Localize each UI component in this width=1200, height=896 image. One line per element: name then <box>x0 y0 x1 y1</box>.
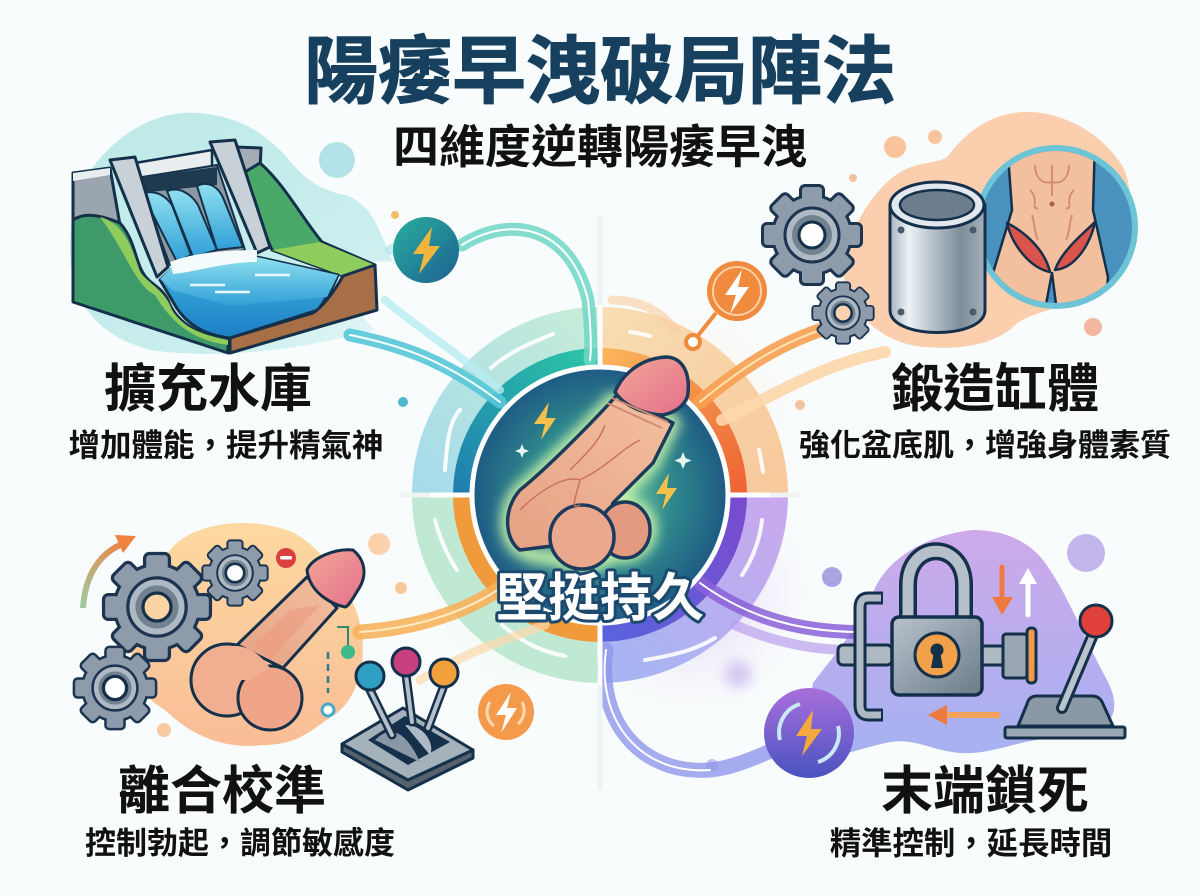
text: reservoir description: 增加體能，提升精氣神 <box>68 427 384 463</box>
icon: padlock <box>838 551 1036 715</box>
icon: small gear right <box>813 283 873 343</box>
panel label: calibration <box>85 763 395 861</box>
icon: metal cylinder <box>890 182 985 332</box>
panel label: lock <box>830 763 1112 861</box>
text: cylinder description: 強化盆底肌，增強身體素質 <box>799 428 1171 463</box>
icon: purple refresh lightning badge <box>764 688 854 778</box>
icon: central anatomy <box>508 357 692 569</box>
panel: calibration background blob <box>131 523 407 746</box>
icon: torso circle <box>977 140 1135 320</box>
flow path: orange streams lower left <box>360 585 545 680</box>
ring: inner quadrant bands <box>463 358 737 632</box>
icon: three lever control box <box>342 648 473 790</box>
icon: control dots <box>322 627 355 716</box>
center rings <box>432 328 768 662</box>
dividers <box>400 215 800 790</box>
icon: calibration anatomy <box>191 550 364 730</box>
heading: reservoir: 擴充水庫 <box>104 361 312 419</box>
icon: dam and reservoir <box>73 140 377 353</box>
panel: reservoir background blob <box>70 113 408 407</box>
heading: calibration: 離合校準 <box>118 763 326 821</box>
flow path: teal streams <box>350 229 591 402</box>
flow path: purple streams <box>605 583 860 770</box>
panel label: reservoir <box>68 361 384 463</box>
panel: lock background blob <box>706 530 1114 771</box>
icon: teal lightning badge <box>393 217 459 283</box>
panel label: cylinder <box>799 361 1171 463</box>
heading: lock: 末端鎖死 <box>881 763 1089 821</box>
ring: outer quadrant bands <box>432 328 768 662</box>
heading: center: 堅挺持久 <box>496 570 704 628</box>
icon: left arrow <box>928 705 1000 725</box>
icon: small gear top left <box>203 541 267 605</box>
icon: large gear left <box>105 555 209 659</box>
flow path: orange streams <box>612 300 885 420</box>
icon: lever <box>1005 605 1125 738</box>
icon: up and down arrows <box>992 567 1037 615</box>
icon: gear bottom left <box>75 648 155 728</box>
heading: cylinder: 鍛造缸體 <box>891 361 1099 419</box>
text: lock description: 精準控制，延長時間 <box>830 826 1112 861</box>
center core circle <box>472 367 728 623</box>
icon: orange curved arrow <box>83 535 136 608</box>
title: 陽痿早洩破局陣法 <box>304 30 896 113</box>
icon: minus badge <box>276 548 296 568</box>
panel: cylinder background blob <box>795 112 1130 410</box>
ring: white dash marks <box>435 332 763 660</box>
text: calibration description: 控制勃起，調節敏感度 <box>85 826 395 861</box>
flow paths <box>350 229 885 770</box>
icon: orange lightning right of levers <box>478 684 534 740</box>
central glow <box>470 360 760 660</box>
icon: large gear right <box>764 187 860 283</box>
subtitle: 四維度逆轉陽痿早洩 <box>393 121 807 173</box>
icon: orange lightning badge <box>686 261 767 349</box>
